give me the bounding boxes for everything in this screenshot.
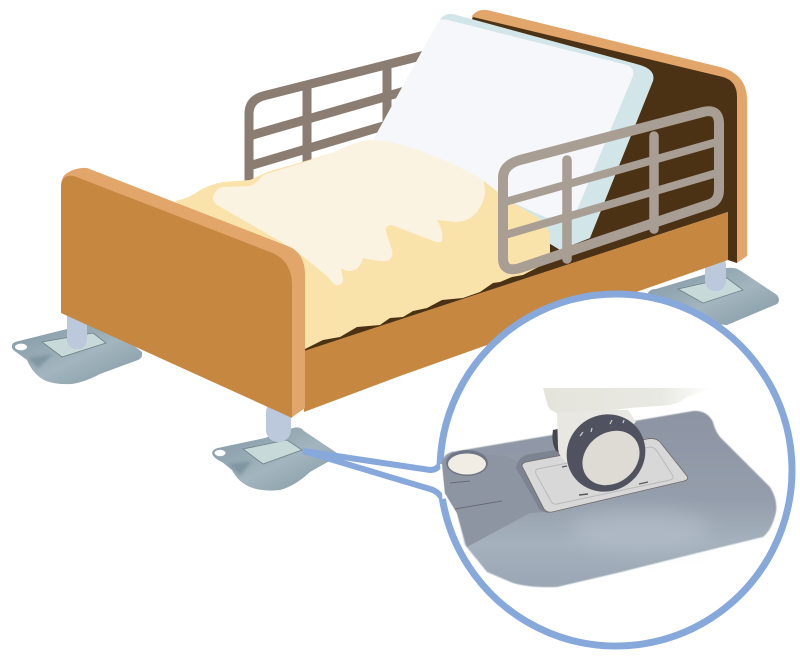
blanket	[175, 140, 550, 349]
connector lines to callout	[303, 451, 442, 499]
headboard	[305, 10, 747, 351]
magnified caster fork	[543, 388, 712, 470]
side rail: rear	[249, 55, 425, 182]
magnified mat hole	[446, 450, 488, 476]
magnified mat lines	[450, 481, 502, 509]
side rail: front	[503, 111, 719, 269]
mattress back section	[373, 14, 653, 250]
callout circle	[440, 294, 792, 646]
leg: front	[266, 400, 291, 442]
magnified plate	[522, 438, 688, 512]
mat: back right	[648, 268, 779, 325]
magnified caster wheel	[551, 399, 661, 507]
bed base rail	[304, 212, 728, 412]
mat: back left	[12, 322, 142, 384]
magnified mat	[442, 411, 776, 587]
leg: back left	[67, 305, 87, 349]
mat: front	[212, 427, 340, 491]
leg: back right	[705, 255, 726, 291]
footboard	[61, 168, 305, 418]
